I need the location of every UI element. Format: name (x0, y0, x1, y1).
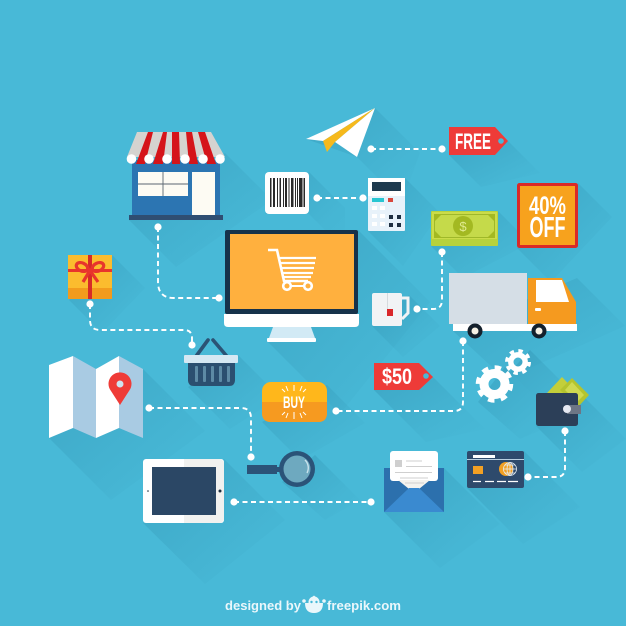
icon: banknote: $ (459, 219, 467, 234)
footer credit (225, 596, 401, 613)
icon: mug (372, 293, 408, 326)
connector: store to monitor (154, 223, 223, 302)
connector: tablet to envelope (230, 498, 375, 506)
icon: monitor with cart (224, 230, 359, 342)
icon: discount sign 40% off: OFF (530, 212, 566, 244)
icon: $50 price tag (374, 363, 433, 390)
connector: plane to free tag (367, 145, 446, 153)
connector: money to mug (413, 248, 446, 313)
icon: wallet with banknotes (536, 377, 589, 426)
footer credit: designed by (225, 599, 301, 613)
icon: shopping cart (268, 250, 316, 290)
icon: discount sign 40% off: 40% (529, 192, 566, 220)
connector: truck to buy button (332, 337, 467, 415)
footer credit: freepik.com (327, 599, 401, 613)
icon: buy button: BUY (283, 393, 305, 412)
icon: buy button (262, 382, 327, 422)
icon: gift box (68, 255, 112, 299)
connector: map to magnifier (145, 404, 255, 461)
icon: folded map with pin (49, 356, 143, 438)
icon: free price tag: FREE (455, 129, 491, 154)
connector: barcode to calculator (313, 194, 367, 202)
icon: credit card (467, 451, 524, 488)
icon: envelope with letter (384, 451, 444, 512)
icon: store (127, 132, 225, 220)
icon: calculator (368, 178, 405, 231)
icon: tablet (143, 459, 224, 523)
icon: paper plane (306, 108, 375, 157)
icon: shopping basket (184, 340, 238, 386)
icon: banknote (431, 211, 498, 246)
icon: delivery truck (449, 273, 577, 338)
icon: small gear (507, 351, 529, 373)
connector: wallet to credit card (524, 427, 569, 481)
icon: barcode (265, 172, 309, 214)
icon: map pin (108, 372, 132, 405)
icon: freepik logo (302, 596, 326, 613)
icon: discount sign 40% off (517, 183, 578, 248)
icon: large gear (478, 368, 511, 400)
icon: $50 price tag: $50 (382, 364, 412, 389)
connector: gift to basket (86, 300, 196, 349)
icon: magnifying glass (247, 451, 315, 487)
